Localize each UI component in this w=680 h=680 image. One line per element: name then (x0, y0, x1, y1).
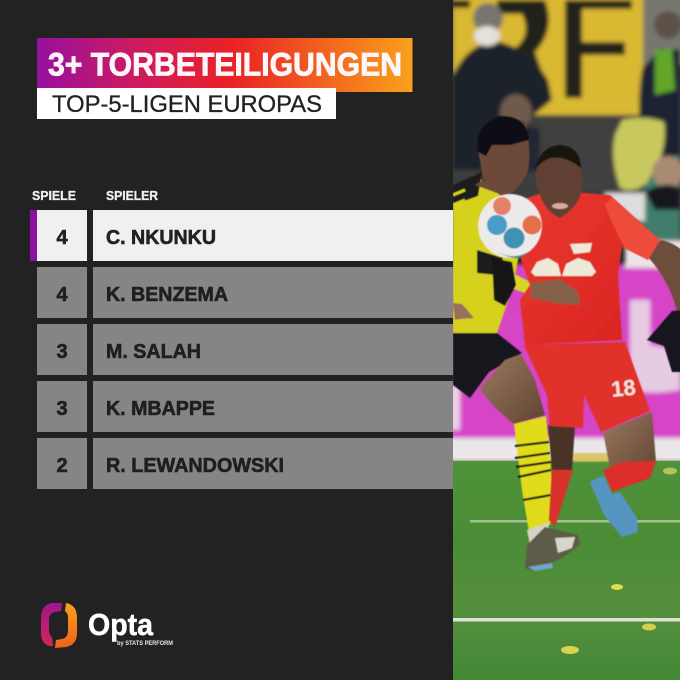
title banner (37, 38, 412, 92)
left hand (531, 279, 580, 305)
head (535, 150, 583, 218)
column header: Spieler: SPIELER (106, 188, 159, 203)
wordmark: Opta (88, 607, 154, 642)
row 1: C. Nkunku, highlighted: 4 (56, 227, 68, 249)
right arm (648, 240, 680, 312)
legs (548, 425, 575, 470)
football (478, 194, 542, 258)
stadium stands background (445, 0, 680, 245)
row 4: K. Mbappe: 3 (56, 398, 68, 420)
red player (Nkunku): 18 (610, 375, 637, 402)
row 1: C. Nkunku, highlighted (30, 210, 453, 261)
sock (514, 416, 552, 532)
sponsor logo: bulls (531, 258, 596, 276)
boot (525, 527, 580, 571)
pink advertising board (445, 240, 680, 462)
yellow player (Bellingham) (453, 116, 580, 571)
shorts (453, 333, 522, 398)
row 5: R. Lewandowski: R. LEWANDOWSKI (106, 455, 284, 477)
row 4: K. Mbappe: K. MBAPPE (106, 398, 215, 420)
shorts (524, 342, 650, 432)
grass pitch (453, 453, 680, 680)
icon: Opta mark (41, 603, 77, 648)
row 3: M. Salah: M. SALAH (106, 341, 201, 363)
row 5: R. Lewandowski (37, 438, 453, 489)
row 3: M. Salah (37, 324, 453, 375)
thigh (480, 354, 545, 424)
row 1: C. Nkunku, highlighted: C. NKUNKU (106, 227, 216, 249)
column header: Spiele: SPIELE (32, 188, 76, 203)
row 5: R. Lewandowski: 2 (56, 455, 68, 477)
photo: two footballers challenging for the ball (445, 0, 680, 680)
row 3: M. Salah: 3 (56, 341, 68, 363)
background panel (0, 0, 453, 680)
title text: 3+ TORBETEILIGUNGEN (48, 46, 402, 82)
Opta logo (41, 603, 173, 648)
row 4: K. Mbappe (37, 381, 453, 432)
row 2: K. Benzema: K. BENZEMA (106, 284, 228, 306)
row 2: K. Benzema (37, 267, 453, 318)
subtitle: TOP-5-LIGEN EUROPAS (52, 91, 322, 118)
byline: by STATS PERFORM (117, 640, 173, 647)
red player (Nkunku) (520, 145, 680, 537)
torso (520, 192, 660, 345)
row 2: K. Benzema: 4 (56, 284, 68, 306)
head (478, 118, 529, 196)
